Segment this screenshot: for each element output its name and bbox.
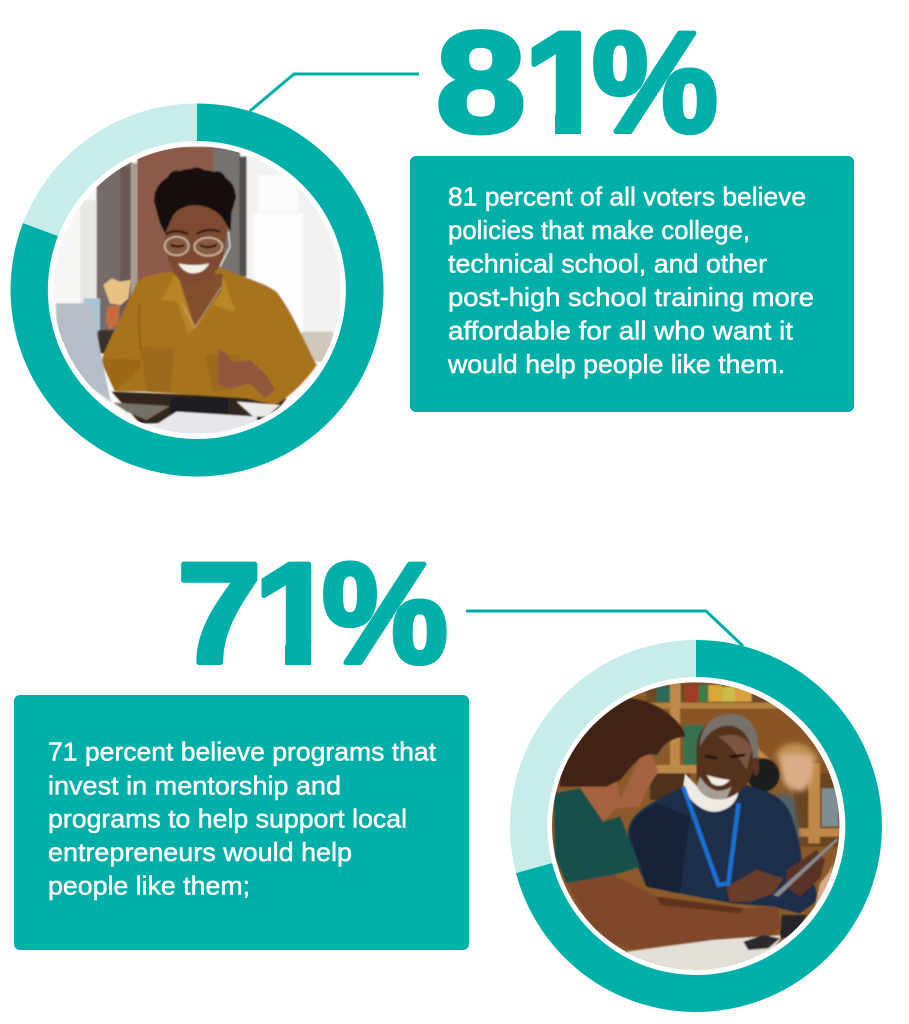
callout text: 81 percent <box>447 181 814 379</box>
callout text: 81 percent: 81 percent of all voters believe <box>448 181 806 211</box>
callout text: 81 percent: policies that make college, <box>448 215 750 245</box>
donut ring: 81 percent dark segment <box>11 103 384 476</box>
heading: 71%: % <box>322 534 448 694</box>
heading: 81%: % <box>592 3 718 163</box>
callout text: 81 percent: post-high school training more <box>448 282 814 312</box>
callout box: 71 percent <box>14 695 469 950</box>
callout text: 71 percent <box>48 737 437 901</box>
callout text: 81 percent: would help people like them. <box>447 349 785 379</box>
callout box: 81 percent <box>410 156 854 412</box>
heading: 81%: 1 <box>524 2 606 162</box>
photo: woman with calculator <box>50 143 347 437</box>
callout text: 71 percent: invest in mentorship and <box>48 770 341 800</box>
donut ring: remaining 19 percent <box>23 104 197 236</box>
donut ring: 71 percent dark segment <box>516 640 882 1012</box>
callout text: 71 percent: people like them; <box>48 871 250 901</box>
callout text: 81 percent: technical school, and other <box>448 248 767 278</box>
leader line: 81% <box>250 74 419 111</box>
donut chart: 71 percent with photo <box>510 640 882 1012</box>
heading: 81% <box>436 2 718 163</box>
photo: mentor and student <box>550 680 847 977</box>
callout text: 81 percent: affordable for all who want it <box>448 315 794 345</box>
donut chart: 81 percent with photo <box>11 103 384 476</box>
heading: 81%: 8 <box>436 3 526 162</box>
heading: 71%: 1 <box>254 533 336 693</box>
callout text: 71 percent: entrepreneurs would help <box>48 837 352 867</box>
heading: 71% <box>177 533 448 694</box>
donut ring: remaining 29 percent <box>510 640 696 873</box>
callout text: 71 percent: programs to help support local <box>48 804 407 834</box>
heading: 71%: 7 <box>177 534 261 694</box>
leader line: 71% <box>466 611 743 646</box>
callout text: 71 percent: 71 percent believe programs that <box>48 737 437 767</box>
